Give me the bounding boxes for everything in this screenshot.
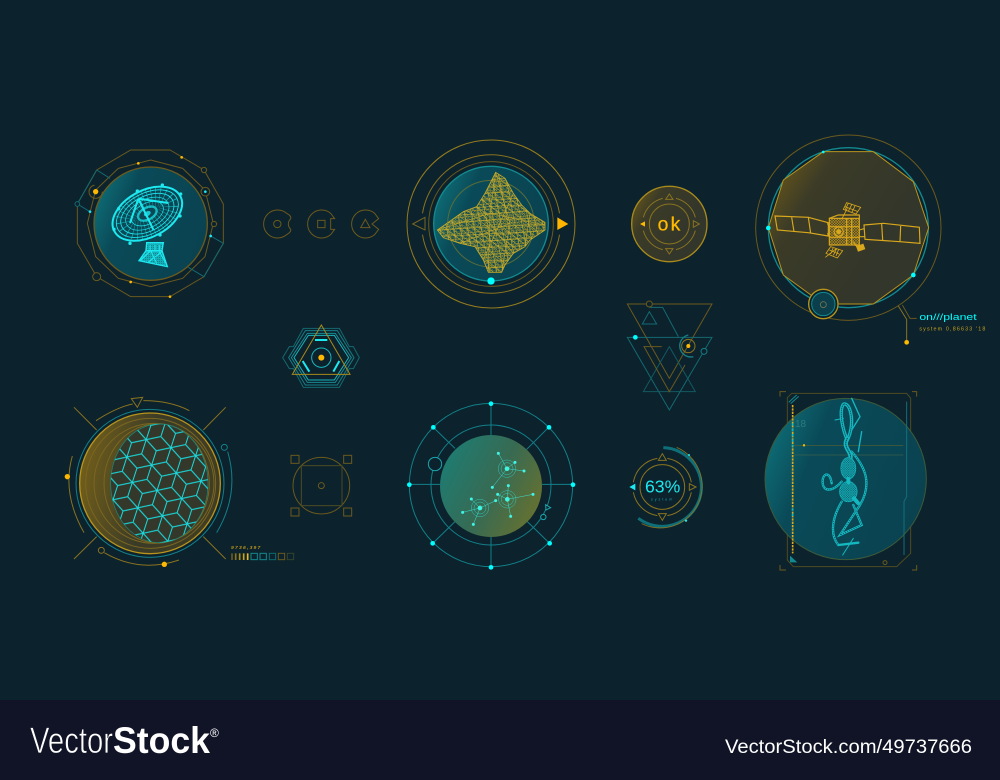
label: 63%: 63% [645, 477, 680, 497]
label: ok: ok [658, 215, 681, 236]
image id: VectorStock.com/49737666 [725, 737, 972, 758]
gold polygon [768, 152, 929, 304]
teal globe [434, 166, 548, 281]
panel: network globe [407, 401, 575, 570]
frame details over globe [789, 395, 907, 565]
gauge: 63 percent dial [629, 447, 702, 528]
label: gauge caption: system [651, 497, 672, 501]
right arrow [557, 217, 568, 230]
side lines [74, 407, 226, 559]
panel: satellite globe [756, 135, 985, 345]
green sphere [440, 435, 542, 537]
logo [30, 720, 219, 761]
level indicator [232, 553, 294, 560]
label: planet name: on///planet [919, 312, 977, 322]
icon: wireframe radio telescope [103, 176, 191, 267]
top arc with arrow [96, 397, 189, 421]
frame details over globe: 18 [795, 419, 807, 430]
logo: Vector [30, 720, 113, 761]
constellation [461, 452, 534, 526]
position dot [487, 277, 495, 285]
outer dodecagon frame [77, 150, 223, 297]
icon: circle button [264, 210, 291, 238]
panel: rhombus sphere [65, 397, 294, 567]
inner dodecagon frame [87, 160, 213, 287]
button: ok dial [632, 186, 707, 262]
wireframe mountain [437, 172, 545, 272]
frame [780, 392, 917, 570]
left arrow [413, 217, 425, 230]
callout leader [898, 305, 917, 345]
logo: ® [210, 726, 219, 740]
ring marker [428, 457, 442, 471]
logo: Stock [113, 720, 210, 761]
icon: triangle button [352, 210, 379, 238]
icon: hexagon target [283, 325, 359, 387]
concentric rings [407, 140, 575, 308]
satellite line drawing [775, 203, 920, 258]
label: data code: 9736,397 [231, 545, 261, 551]
icon: square button [308, 210, 335, 238]
lens marker [809, 289, 838, 319]
icon: framed circle target [291, 455, 352, 516]
panel: helix specimen [765, 392, 926, 570]
dish globe [94, 167, 207, 280]
left arc with dot [65, 456, 84, 533]
panel: radar dish HUD [75, 150, 223, 298]
cube mesh sphere [110, 424, 208, 543]
icon: overlapping triangles [627, 301, 712, 410]
gold disc with rings [80, 413, 220, 554]
helix strands [823, 398, 866, 555]
bottom arc with dot [98, 547, 179, 567]
right arc with ring [217, 444, 232, 533]
panel: wireframe mountain globe [407, 140, 575, 308]
node markers [75, 156, 217, 298]
footer bar [0, 700, 1000, 780]
teal globe [765, 398, 926, 560]
cyan nodes [766, 151, 916, 277]
outer nodes [407, 401, 575, 570]
icons: three notched circle buttons [264, 210, 379, 238]
label: planet code: system 0,86633 '18 [919, 326, 985, 332]
